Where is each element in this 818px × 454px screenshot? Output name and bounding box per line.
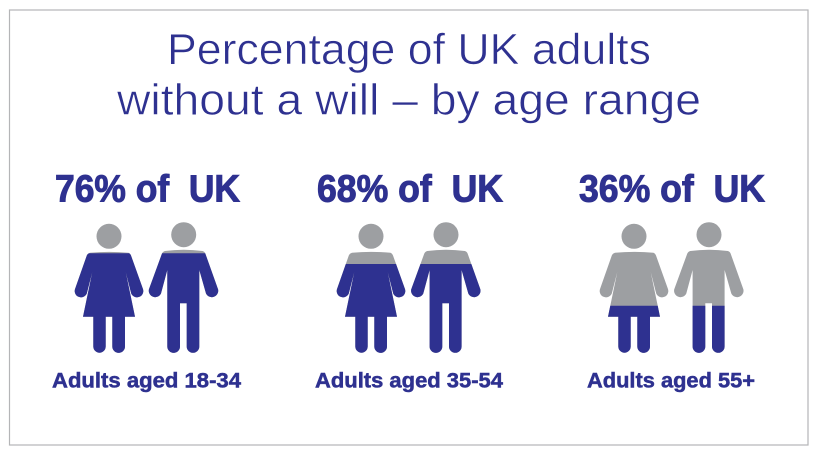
panel: adults aged 18-34 bbox=[52, 169, 241, 392]
label: Adults aged 35-54: Adults aged 35-54 bbox=[315, 369, 503, 392]
heading: 36% of UK: 36% of UK bbox=[579, 169, 766, 211]
icon: man 36% filled bbox=[674, 222, 744, 353]
panel: adults aged 55+ bbox=[579, 169, 766, 392]
label: Adults aged 55+: Adults aged 55+ bbox=[587, 369, 755, 392]
icon: woman 76% filled bbox=[75, 224, 143, 353]
title: without a will – by age range bbox=[116, 75, 701, 124]
title: Percentage of UK adults bbox=[167, 25, 651, 74]
panel: adults aged 35-54 bbox=[315, 169, 504, 392]
title bbox=[116, 25, 701, 124]
label: Adults aged 18-34: Adults aged 18-34 bbox=[52, 369, 241, 392]
icon: man 76% filled bbox=[149, 222, 218, 353]
heading: 76% of UK: 76% of UK bbox=[55, 169, 241, 211]
icon: woman 36% filled bbox=[600, 224, 668, 353]
icon: woman 68% filled bbox=[337, 224, 405, 353]
heading: 68% of UK: 68% of UK bbox=[317, 169, 504, 211]
icon: man 68% filled bbox=[411, 222, 481, 353]
